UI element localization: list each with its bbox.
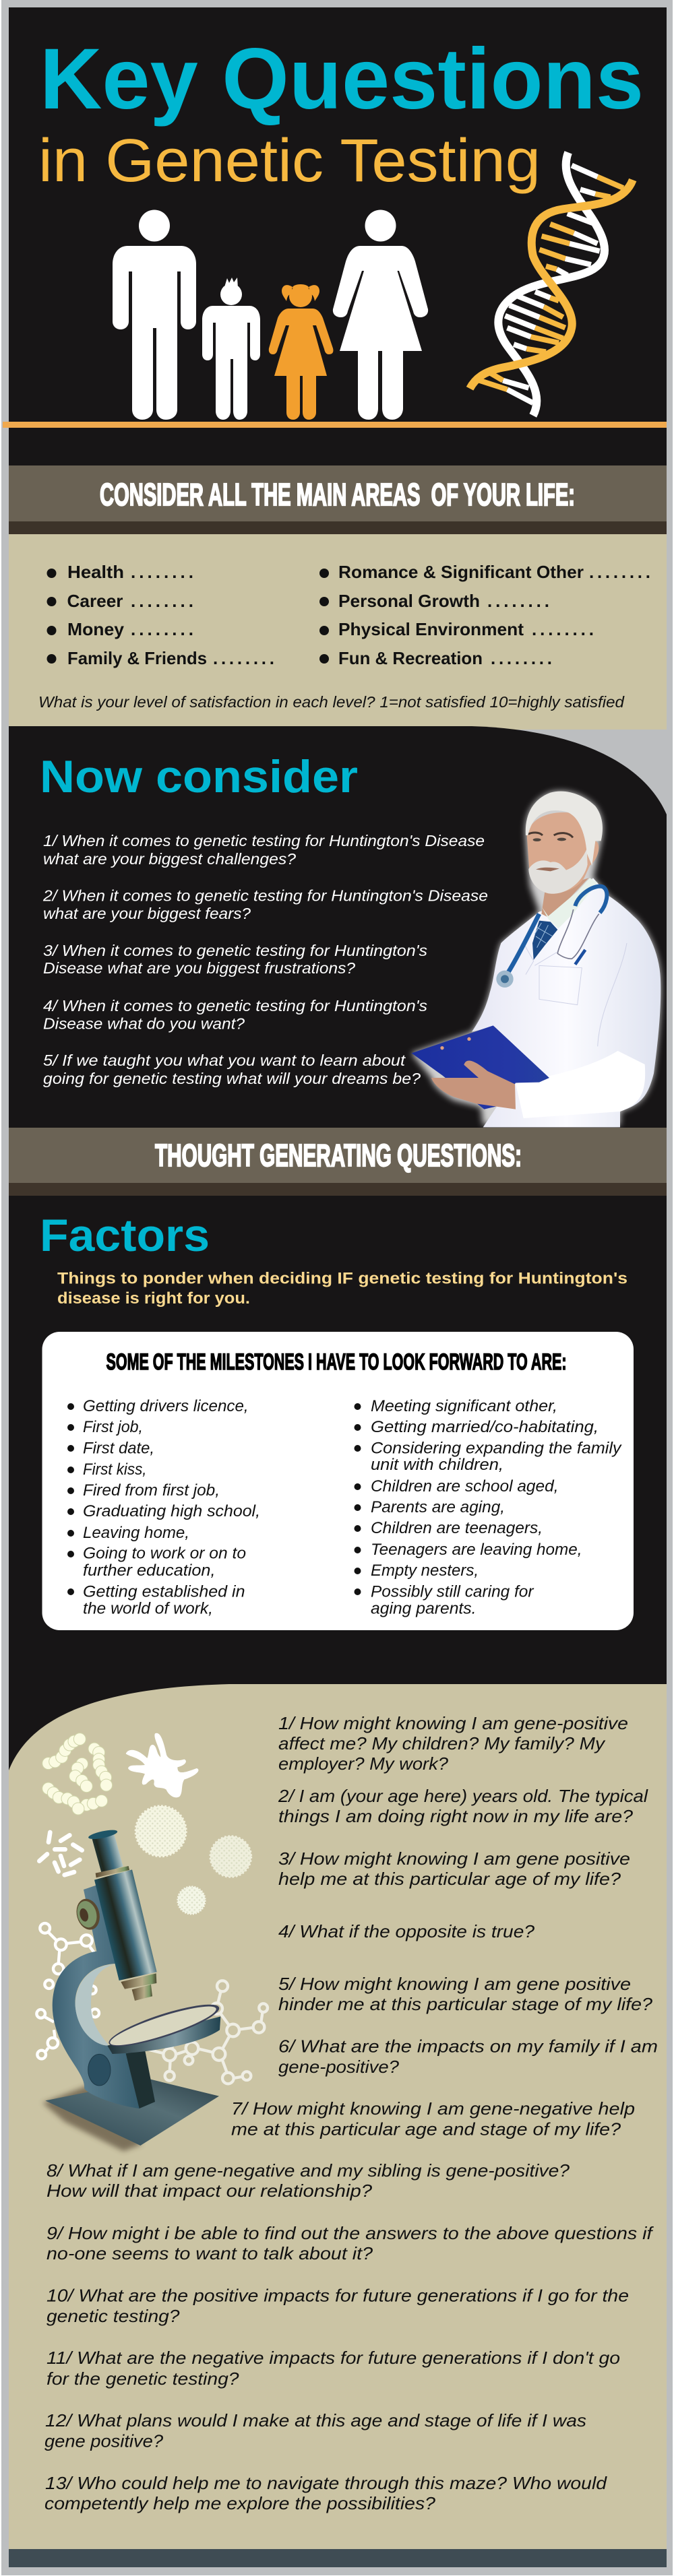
bacteria chains [42,1733,113,1815]
list: life areas right column: Personal Growth [338,591,480,611]
microscope tube [94,1869,157,1981]
list: milestones right column: Meeting significant other, [371,1397,557,1415]
microscope eyepiece [92,1834,123,1873]
heading: factors: Factors [40,1210,210,1261]
illustration: microbes and microscope [36,1733,268,2151]
question list: lower block: for the genetic testing? [47,2369,239,2389]
icon: boy [202,278,260,420]
list: milestones left column: First job, [83,1418,143,1436]
list: milestones left column: the world of work, [83,1599,213,1618]
microscope knob [73,1896,103,1933]
question list: upper block: affect me? My children? My family? My [278,1733,606,1753]
panel: reflection questions [9,1684,667,2549]
question list: now consider: 3/ When it comes to genetic testing for Huntington's [43,942,428,959]
question list: upper block: 6/ What are the impacts on my family if I am [278,2036,658,2056]
title: Key Questions: Key Questions [40,31,644,127]
question list: upper block: hinder me at this particular stage of my life? [278,1994,653,2014]
panel: thought generating band [9,1128,667,1196]
panel: life areas [9,534,667,730]
question list: now consider: what are your biggest fears? [43,905,251,922]
question list: upper block: help me at this particular age of my life? [278,1869,621,1889]
neck and shirt [541,878,588,918]
icon: father [113,210,196,420]
list: life areas right column: Physical Environment [338,619,524,639]
list: life areas right column: ........ [491,648,552,668]
list: milestones right column: Parents are aging, [371,1498,505,1516]
list: life areas left column: ........ [213,648,274,668]
panel: now consider [9,726,667,1128]
question list: upper block [231,1713,658,2139]
microscope base [45,2080,219,2146]
list: life areas left column: Family & Friends [67,648,207,668]
icon: girl [269,284,333,420]
list: milestones right column: Teenagers are leaving home, [371,1541,582,1559]
list: life areas left column: Health [67,562,124,582]
list: milestones right column: aging parents. [371,1599,476,1618]
list: milestones left column: Going to work or on to [83,1544,246,1563]
question list: upper block: 5/ How might knowing I am gene positive [278,1974,631,1994]
question list: lower block: 9/ How might i be able to find out the answers to the above questions if [47,2223,654,2243]
stethoscope [508,887,607,972]
question list: upper block: 2/ I am (your age here) years old. The typical [278,1786,648,1806]
subtitle: in Genetic Testing: in Genetic Testing [38,127,541,195]
rod bacteria [39,1832,82,1875]
question list: upper block: 3/ How might knowing I am gene positive [278,1848,630,1869]
list: milestones right column: unit with children, [371,1456,503,1474]
factors intro [57,1269,627,1308]
head [527,812,599,893]
question list: upper block: me at this particular age and stage of my life? [231,2119,621,2139]
question list: lower block: 13/ Who could help me to navigate through this maze? Who would [45,2473,608,2493]
list: life areas left column [47,562,274,668]
hand [431,1061,516,1109]
list: life areas right column [319,562,650,668]
list: life areas right column: ........ [487,591,549,611]
question list: upper block: 4/ What if the opposite is true? [278,1921,535,1941]
list: life areas right column: ........ [532,619,594,639]
question list: now consider: 2/ When it comes to genetic testing for Huntington's Disease [42,887,488,904]
list: milestones left column: Fired from first job, [83,1481,220,1500]
question list: now consider: what are your biggest challenges? [43,850,296,868]
list: life areas left column: ........ [131,591,193,611]
illustration: doctor [411,792,661,1127]
question list: lower block: 12/ What plans would I make at this age and stage of life if I was [45,2410,586,2430]
list: milestones left column: Leaving home, [83,1524,189,1542]
coat [472,878,661,1127]
panel: factors [9,1196,667,1775]
list: milestones right column [355,1397,623,1618]
question list: lower block: gene positive? [44,2430,164,2451]
question list: lower block: How will that impact our relationship? [47,2181,373,2201]
list: milestones left column: further education, [83,1561,216,1580]
panel: milestones card [42,1332,634,1630]
list: life areas right column: ........ [589,562,650,582]
footer bar [9,2549,667,2567]
list: milestones right column: Considering expanding the family [371,1439,623,1458]
question list: now consider: Disease what do you want? [43,1015,245,1032]
heading: now consider: Now consider [40,751,358,802]
list: life areas left column: ........ [131,619,193,639]
panel: header [3,7,667,465]
list: life areas left column: ........ [131,562,193,582]
molecule left [36,1923,99,2059]
question list: now consider: Disease what are you biggest frustrations? [43,959,355,977]
question list: upper block: things I am doing right now in my life are? [278,1806,634,1826]
list: milestones left column: First date, [83,1439,154,1458]
list: milestones right column: Children are teenagers, [371,1519,543,1537]
list: milestones left column: Getting established in [83,1583,245,1601]
question list: upper block: 7/ How might knowing I am gene-negative help [231,2098,635,2119]
icon: mother [333,210,428,420]
list: life areas left column: Career [67,591,123,611]
question list: now consider: going for genetic testing what will your dreams be? [43,1070,421,1087]
microscope shadow [42,2084,142,2151]
question list: upper block: gene-positive? [278,2057,400,2077]
question list: upper block: employer? My work? [278,1753,449,1774]
molecule right [146,1981,268,2084]
question list: now consider [42,832,488,1087]
spiky spores [135,1806,251,1914]
factors intro: Things to ponder when deciding IF genetic testing for Huntington's [57,1269,627,1288]
list: milestones right column: Empty nesters, [371,1561,479,1580]
panel: consider heading band [9,465,667,534]
list: milestones right column: Children are school aged, [371,1477,558,1495]
clipboard [412,1025,549,1109]
microscope arm [53,1885,155,2108]
tie [532,921,557,960]
question list: now consider: 4/ When it comes to genetic testing for Huntington's [43,997,428,1015]
question list: now consider: 1/ When it comes to genetic testing for Huntington's Disease [43,832,485,849]
list: life areas right column: Fun & Recreation [338,648,483,668]
orange divider line [3,422,667,428]
question list: lower block: 10/ What are the positive impacts for future generations if I go for the [47,2285,629,2305]
question list: lower block: genetic testing? [47,2306,180,2326]
icon: family figures [113,210,428,420]
list: milestones right column: Possibly still caring for [371,1583,534,1601]
satisfaction question: What is your level of satisfaction in each level? 1=not satisfied 10=highly satisfied [38,693,625,711]
list: milestones left column: First kiss, [83,1460,147,1479]
amoeba [126,1733,198,1797]
list: milestones right column: Getting married/co-habitating, [371,1418,599,1436]
icon: DNA helix [470,152,633,416]
question list: lower block: no-one seems to want to talk about it? [47,2243,373,2263]
list: milestones left column [67,1397,260,1618]
question list: upper block: 1/ How might knowing I am gene-positive [278,1713,628,1733]
microscope stage [126,2050,155,2108]
list: life areas left column: Money [67,619,125,639]
question list: lower block: 11/ What are the negative impacts for future generations if I don't go [47,2348,620,2368]
question list: lower block: competently help me explore the possibilities? [44,2493,436,2513]
question list: lower block: 8/ What if I am gene-negative and my sibling is gene-positive? [47,2160,570,2181]
factors intro: disease is right for you. [57,1289,250,1308]
list: life areas right column: Romance & Significant Other [338,562,584,582]
arm crescent highlight [75,1964,115,2046]
list: milestones left column: Graduating high school, [83,1502,260,1520]
question list: lower block [44,2160,654,2513]
list: milestones left column: Getting drivers licence, [83,1397,249,1415]
question list: now consider: 5/ If we taught you what you want to learn about [43,1052,406,1069]
